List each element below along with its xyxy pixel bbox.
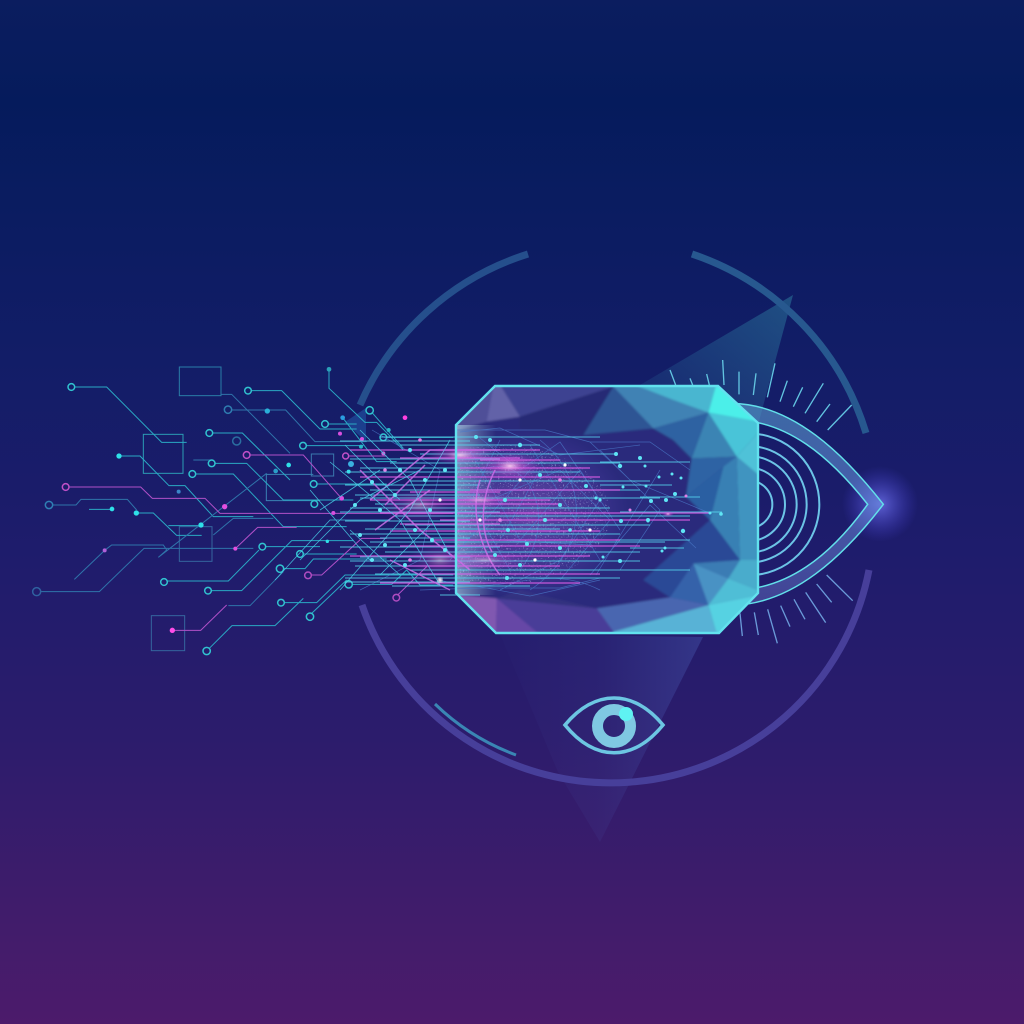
- square nodes: [143, 367, 334, 651]
- stream cyan lines: [340, 437, 722, 595]
- circuit traces: [33, 367, 453, 655]
- blue traces: [40, 394, 367, 606]
- data streams entering and crossing the gem: [275, 428, 722, 596]
- stream pink lines: [350, 450, 710, 583]
- cyan traces: [75, 369, 453, 648]
- small eye iris: [598, 710, 630, 742]
- large eye: [670, 360, 883, 643]
- gem facets: [457, 387, 757, 632]
- small eye icon: [565, 698, 663, 753]
- lower lashes: [740, 575, 853, 643]
- gem left edge glow: [456, 425, 496, 595]
- eye lid band: [733, 403, 883, 605]
- translucent triangle beam: [345, 295, 793, 842]
- small teal arc: [435, 704, 516, 755]
- small eye highlight: [619, 707, 633, 721]
- eye outline: [733, 403, 883, 605]
- stream bright diagonals: [360, 450, 500, 590]
- upper lashes: [670, 360, 852, 430]
- tip glow: [842, 466, 918, 542]
- stream dim blue lines: [360, 428, 712, 596]
- stream particles: [353, 435, 723, 580]
- gem outline: [456, 386, 758, 633]
- scanner ring segments: [360, 254, 869, 783]
- pink traces: [69, 455, 453, 630]
- gem speckle: [457, 445, 610, 585]
- gem inner purple core: [457, 442, 616, 588]
- crystal gem: [457, 387, 757, 632]
- small eye outline: [565, 698, 663, 753]
- hollow node circles: [33, 384, 400, 655]
- stream glow blobs: [376, 445, 674, 582]
- iris rings: [677, 433, 819, 575]
- solid node dots: [103, 367, 407, 633]
